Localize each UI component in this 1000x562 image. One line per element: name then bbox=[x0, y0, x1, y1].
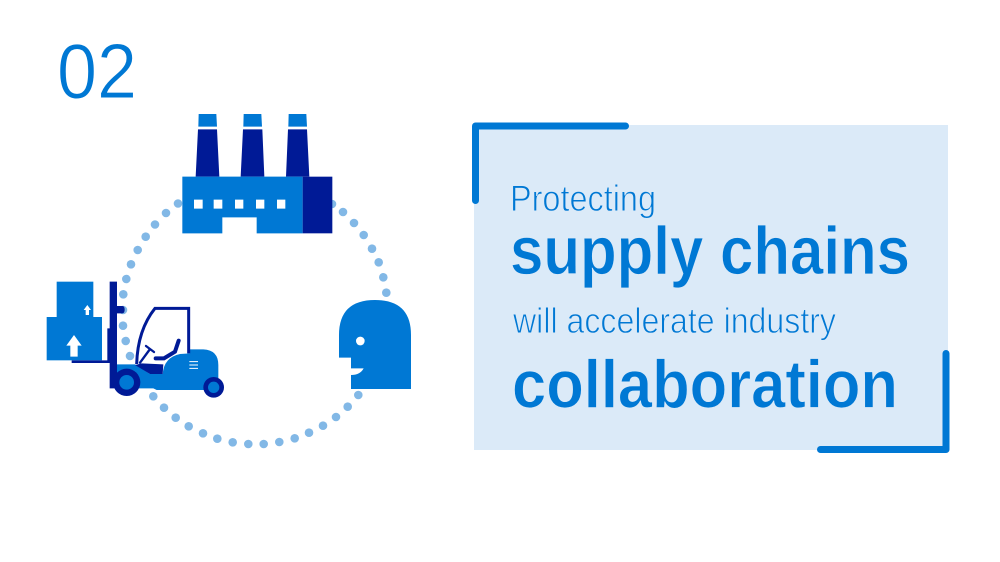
front wheel bbox=[113, 369, 140, 396]
section number: 02 bbox=[57, 27, 137, 115]
seat base bbox=[135, 363, 163, 374]
icon: forklift with boxes bbox=[47, 282, 224, 398]
text: will accelerate industry: will accelerate industry bbox=[512, 300, 836, 341]
cab frame bbox=[137, 308, 189, 364]
dotted circle bbox=[119, 199, 391, 448]
boxes bbox=[47, 282, 102, 360]
vent lines bbox=[189, 362, 198, 368]
corner bracket top left bbox=[476, 126, 626, 200]
corner bracket bottom right bbox=[820, 354, 946, 450]
text: supply chains: supply chains bbox=[510, 213, 910, 289]
icon: factory bbox=[182, 114, 332, 233]
icon: human head bbox=[339, 300, 411, 389]
rear wheel bbox=[203, 377, 224, 398]
mast and fork bbox=[72, 282, 125, 388]
text: Protecting: Protecting bbox=[510, 178, 656, 219]
truck body bbox=[115, 349, 218, 390]
panel: message bbox=[474, 125, 948, 450]
steering and seat bbox=[140, 346, 154, 363]
text: collaboration: collaboration bbox=[512, 346, 898, 422]
